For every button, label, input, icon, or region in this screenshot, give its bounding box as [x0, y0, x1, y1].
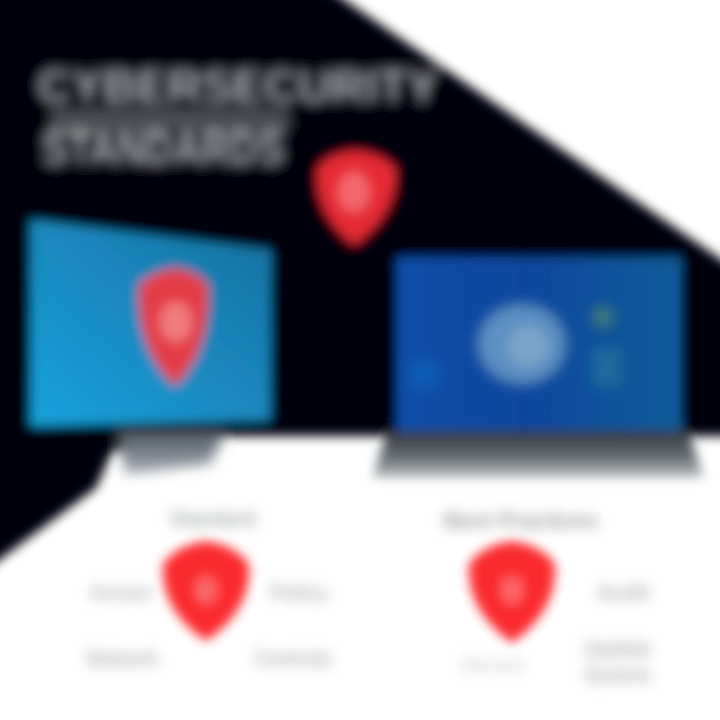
panel: bottom right column [444, 508, 652, 687]
panel: bottom left column [86, 506, 332, 671]
panel: left monitor [31, 220, 271, 474]
title [38, 60, 438, 174]
label above shield: Best Practices [444, 508, 598, 533]
monitor stand [116, 430, 226, 474]
laptop status dot [592, 306, 614, 328]
icon: bottom left shield [163, 541, 249, 641]
title haze between lines [50, 108, 290, 132]
title line one: CYBERSECURITY [38, 60, 438, 112]
side labels: Access [90, 580, 152, 605]
side labels [86, 580, 332, 671]
panel: right laptop [372, 257, 704, 478]
side labels: Controls [254, 646, 332, 671]
laptop side panel [592, 347, 622, 387]
side labels: Network [86, 646, 159, 671]
icon: top red shield [317, 151, 395, 245]
side labels [460, 580, 652, 687]
side labels: Secure [460, 652, 526, 677]
side labels: Audit [596, 580, 651, 605]
laptop base [372, 430, 704, 478]
side labels: Update [584, 636, 652, 661]
title line two: STANDARDS [42, 122, 284, 174]
label above shield: Standard [170, 506, 256, 531]
icon: monitor red shield [139, 268, 208, 386]
side labels: Policy [270, 580, 329, 605]
laptop globe [478, 304, 566, 384]
icon: bottom right shield [469, 541, 555, 643]
laptop highlight [408, 358, 440, 390]
side labels: Systems [584, 662, 652, 687]
laptop screen [397, 257, 681, 431]
monitor screen [31, 220, 271, 426]
